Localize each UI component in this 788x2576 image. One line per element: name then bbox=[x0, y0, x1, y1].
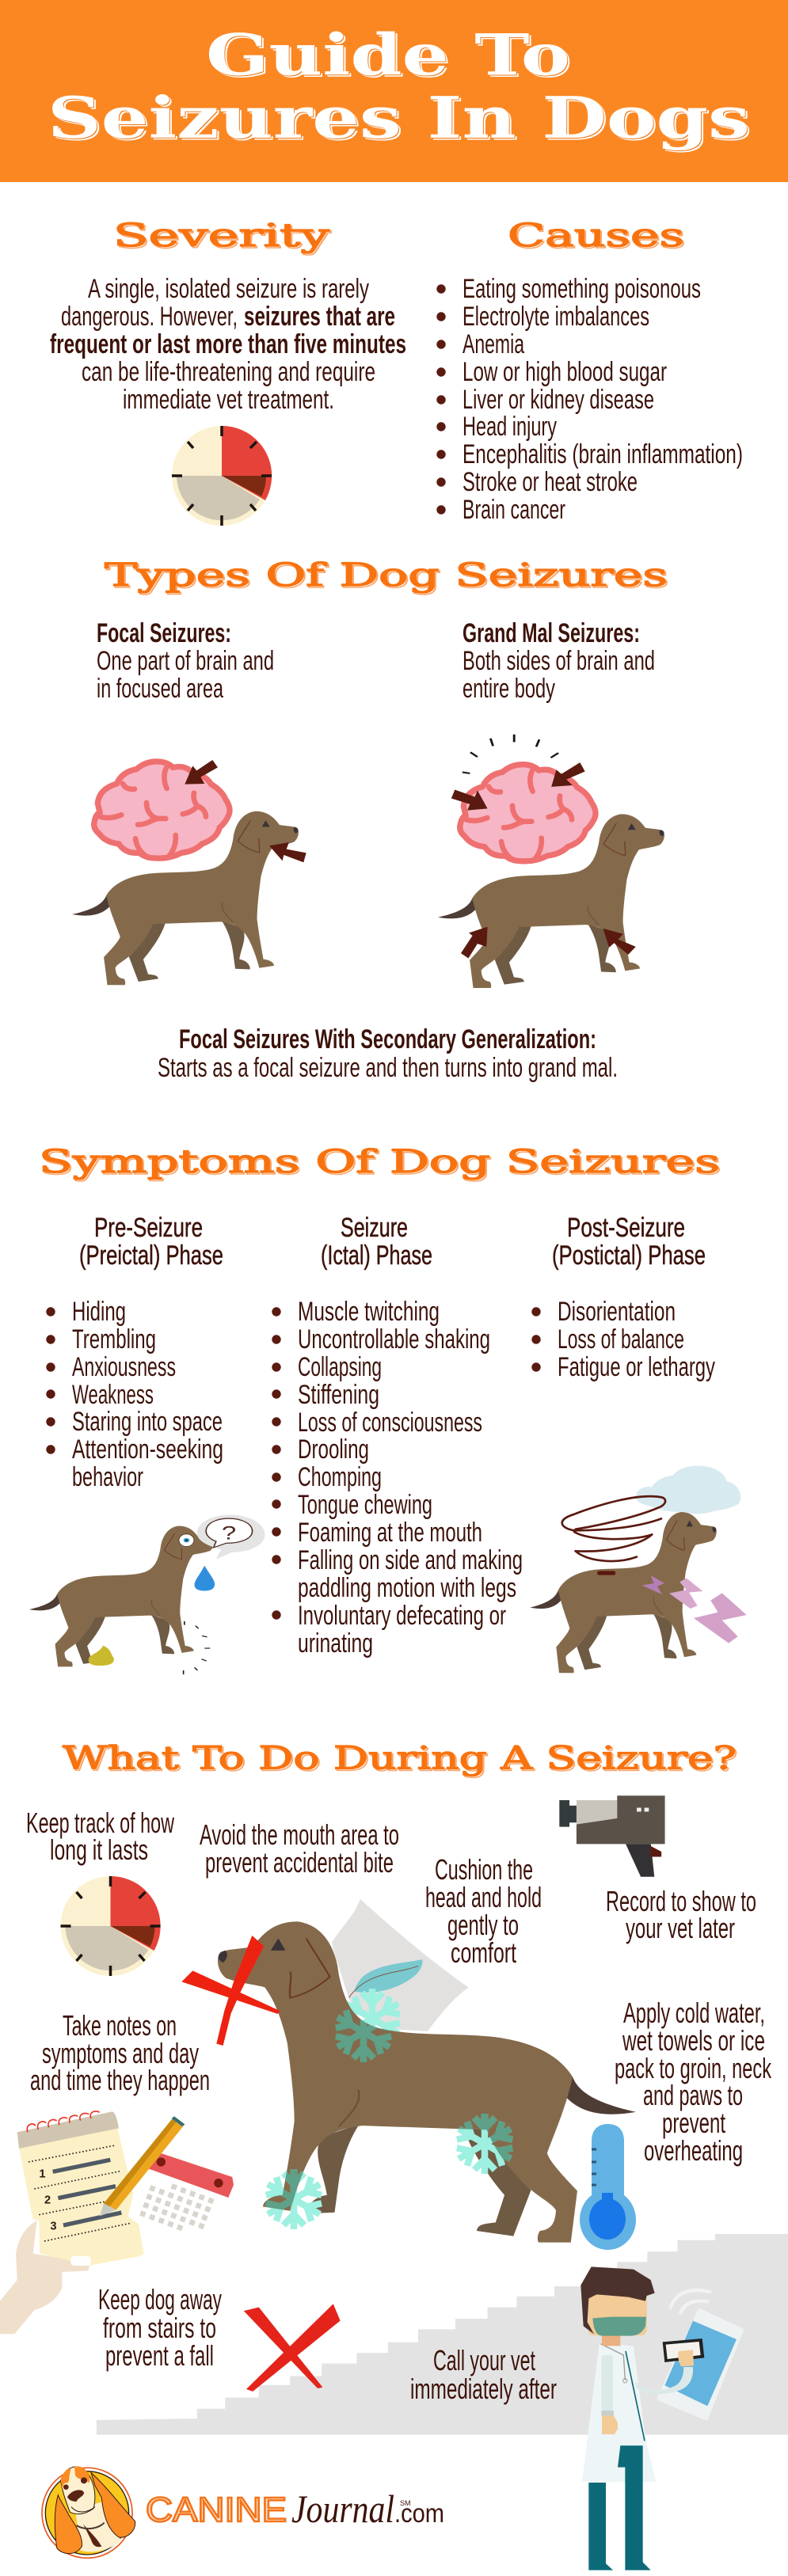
column: pre-seizure: Anxiousness bbox=[72, 1352, 176, 1382]
text: keep track bbox=[26, 1807, 175, 1866]
arrow: brain bbox=[185, 760, 218, 785]
illustration: grand mal seizure dog and brain bbox=[438, 735, 664, 988]
icon: cloud bbox=[636, 1466, 740, 1514]
text block: focal seizures: One part of brain and bbox=[97, 646, 274, 676]
text: call your vet: Call your vet bbox=[433, 2344, 535, 2377]
illustration: vet with phone bbox=[581, 2266, 742, 2570]
list: causes text: Brain cancer bbox=[463, 495, 565, 525]
text: avoid mouth: Avoid the mouth area to bbox=[200, 1818, 399, 1851]
panel: causes bbox=[436, 218, 743, 525]
list: causes text: Stroke or heat stroke bbox=[463, 467, 638, 497]
column: seizure bbox=[272, 1213, 523, 1658]
column: seizure: Falling on side and making bbox=[298, 1545, 523, 1575]
text: take notes: symptoms and day bbox=[42, 2037, 199, 2069]
list: causes text: Electrolyte imbalances bbox=[463, 302, 649, 332]
panel: severity bbox=[50, 218, 406, 526]
text: take notes: Take notes on bbox=[63, 2009, 177, 2042]
text block: severity description: can be life-threatening and require bbox=[82, 357, 375, 387]
icon: snowflake groin bbox=[454, 2114, 516, 2174]
arrows: grand mal bbox=[451, 762, 636, 959]
icon: hand bbox=[0, 2221, 89, 2334]
illustration: pre-seizure dog bbox=[29, 1515, 265, 1674]
heading: causes: Causes bbox=[509, 219, 686, 256]
icon: speech bubble bbox=[197, 1515, 265, 1560]
icon: motion ticks bbox=[184, 1621, 210, 1674]
heading: causes bbox=[508, 218, 686, 256]
heading: types bbox=[105, 557, 669, 595]
logo text: dot com: .com bbox=[394, 2498, 444, 2528]
icon: snowflake paw bbox=[263, 2169, 325, 2229]
column: pre-seizure: (Preictal) Phase bbox=[79, 1241, 223, 1271]
column: seizure: Involuntary defecating or bbox=[298, 1601, 506, 1631]
column: post-seizure: Loss of balance bbox=[558, 1324, 684, 1354]
text block: grand mal seizures: entire body bbox=[463, 674, 555, 704]
column: seizure: Muscle twitching bbox=[298, 1297, 440, 1327]
text: keep away from stairs: from stairs to bbox=[103, 2312, 216, 2344]
column: pre-seizure bbox=[46, 1213, 223, 1492]
icon: vet legs bbox=[588, 2445, 651, 2570]
heading: severity: Severity bbox=[115, 219, 332, 256]
arrow: mouth bbox=[269, 842, 306, 862]
icon: video camera bbox=[559, 1795, 665, 1877]
illustration: post-seizure dog bbox=[530, 1466, 747, 1673]
text block: grand mal seizures: Both sides of brain and bbox=[463, 646, 655, 676]
text: cushion: gently to bbox=[447, 1909, 519, 1941]
title: Guide To: Guide To bbox=[207, 22, 571, 89]
heading: symptoms bbox=[39, 1144, 721, 1182]
icon: snowflake neck bbox=[335, 2008, 392, 2062]
heading: types: Types Of Dog Seizures bbox=[105, 557, 668, 594]
text block: secondary generalization bbox=[158, 1024, 618, 1083]
logo text: canine: CANINE bbox=[146, 2491, 287, 2529]
icon: small device and hand bbox=[663, 2339, 704, 2366]
column: pre-seizure: Hiding bbox=[72, 1297, 126, 1327]
icon: notepad: 2 bbox=[44, 2194, 51, 2206]
icon: pain bolts bbox=[642, 1575, 747, 1643]
text: keep track: Keep track of how bbox=[26, 1807, 175, 1839]
list: causes text: Low or high blood sugar bbox=[463, 357, 667, 387]
column: seizure: (Ictal) Phase bbox=[321, 1241, 432, 1271]
text block: grand mal seizures: Grand Mal Seizures: bbox=[463, 618, 640, 648]
text: take notes: and time they happen bbox=[30, 2064, 210, 2096]
logo text: journal: Journal bbox=[291, 2487, 394, 2531]
icon: drool drop bbox=[195, 1566, 215, 1590]
icon: brown mark bbox=[597, 1571, 615, 1575]
column: seizure: Chomping bbox=[298, 1462, 382, 1492]
list: causes text: Anemia bbox=[463, 329, 524, 359]
text block: severity description: frequent or last more than five minutes bbox=[50, 329, 406, 359]
illustration: focal seizure dog and brain bbox=[72, 760, 306, 985]
column: pre-seizure: Staring into space bbox=[72, 1407, 223, 1437]
icon: red x bbox=[244, 2304, 341, 2392]
icon: vet coat bbox=[582, 2343, 693, 2482]
panel: types of dog seizures bbox=[72, 557, 669, 1083]
column: post-seizure: (Postictal) Phase bbox=[552, 1241, 706, 1271]
column: seizure: Collapsing bbox=[298, 1352, 382, 1382]
text: record: your vet later bbox=[626, 1912, 735, 1944]
heading: what to do: What To Do During A Seizure? bbox=[63, 1740, 737, 1776]
column: post-seizure: Post-Seizure bbox=[567, 1213, 685, 1243]
column: pre-seizure: behavior bbox=[72, 1462, 143, 1492]
column: post-seizure: Disorientation bbox=[558, 1297, 676, 1327]
icon: notepad: 3 bbox=[50, 2221, 56, 2233]
heading: severity: Severity bbox=[113, 218, 330, 254]
text: cushion: Cushion the bbox=[435, 1853, 533, 1886]
text: keep away from stairs bbox=[98, 2283, 222, 2372]
icon: phone bbox=[659, 2290, 742, 2418]
list: causes text: Liver or kidney disease bbox=[463, 385, 654, 415]
text: call your vet bbox=[410, 2344, 557, 2405]
icon: basset hound badge bbox=[42, 2466, 135, 2558]
heading: what to do: What To Do During A Seizure? bbox=[64, 1742, 738, 1778]
list: causes text bbox=[463, 274, 743, 525]
icon: timer clock bbox=[60, 1876, 161, 1976]
text: keep away from stairs: prevent a fall bbox=[105, 2339, 214, 2372]
text: cushion bbox=[425, 1853, 542, 1969]
icon: speech bubble: ? bbox=[222, 1523, 236, 1544]
text: keep track: long it lasts bbox=[50, 1833, 148, 1866]
title: Guide To: Guide To bbox=[208, 23, 573, 90]
text: avoid mouth: prevent accidental bite bbox=[205, 1846, 394, 1879]
title banner bbox=[0, 0, 788, 182]
column: seizure: Stiffening bbox=[298, 1380, 379, 1410]
text block: severity description: immediate vet treatment. bbox=[123, 385, 334, 415]
list: causes text: Head injury bbox=[463, 412, 557, 442]
title: Guide To: Guide To bbox=[206, 21, 570, 89]
icon: seizure rays bbox=[463, 735, 558, 773]
column: pre-seizure: Attention-seeking bbox=[72, 1434, 223, 1465]
text block: grand mal seizures bbox=[463, 618, 655, 704]
heading: what to do bbox=[63, 1740, 738, 1778]
icon: poop bbox=[89, 1646, 114, 1666]
heading: symptoms: Symptoms Of Dog Seizures bbox=[39, 1144, 720, 1180]
title: Seizures In Dogs: Seizures In Dogs bbox=[48, 85, 751, 152]
text block: severity description: seizures that are bbox=[244, 302, 395, 332]
illustration: notepad and hand bbox=[0, 2111, 234, 2334]
column: seizure: Seizure bbox=[341, 1213, 408, 1243]
icon: notepad bbox=[17, 2111, 144, 2266]
text block: secondary generalization: Focal Seizures With Secondary Generalization: bbox=[179, 1024, 596, 1054]
logo text: service mark: SM bbox=[400, 2499, 410, 2507]
column: seizure: Foaming at the mouth bbox=[298, 1518, 482, 1548]
text: keep away from stairs: Keep dog away bbox=[98, 2283, 222, 2316]
panel: what to do during a seizure bbox=[0, 1740, 772, 2570]
icon: notepad: 1 bbox=[39, 2168, 45, 2181]
icon: calendar bbox=[140, 2149, 234, 2228]
column: post-seizure bbox=[531, 1213, 715, 1382]
text block: focal seizures bbox=[97, 618, 274, 704]
text: avoid mouth bbox=[200, 1818, 399, 1879]
column: pre-seizure: Trembling bbox=[72, 1324, 156, 1354]
text block: focal seizures: Focal Seizures: bbox=[97, 618, 231, 648]
panel: symptoms bbox=[29, 1144, 747, 1674]
icon: red x on mouth bbox=[181, 1936, 280, 2046]
column: pre-seizure: Weakness bbox=[72, 1380, 154, 1410]
logo: canine journal bbox=[42, 2466, 444, 2558]
text: take notes bbox=[30, 2009, 210, 2096]
text: apply cold water: prevent bbox=[662, 2107, 725, 2139]
column: seizure: paddling motion with legs bbox=[298, 1573, 516, 1603]
illustration: large dog bbox=[218, 1921, 636, 2243]
text: apply cold water bbox=[615, 1997, 772, 2167]
text block: focal seizures: in focused area bbox=[97, 674, 223, 704]
icon: thermometer bbox=[580, 2124, 636, 2250]
text: call your vet: immediately after bbox=[410, 2373, 557, 2405]
column: post-seizure: Fatigue or lethargy bbox=[558, 1352, 715, 1382]
text block: severity description: dangerous. However, bbox=[61, 302, 238, 332]
title: Seizures In Dogs: Seizures In Dogs bbox=[50, 85, 752, 154]
text: cushion: comfort bbox=[451, 1936, 516, 1969]
icon: snowflake behind neck bbox=[341, 1989, 403, 2049]
heading: causes: Causes bbox=[508, 218, 684, 254]
heading: symptoms: Symptoms Of Dog Seizures bbox=[40, 1146, 721, 1182]
column: seizure: Drooling bbox=[298, 1434, 369, 1465]
text block: severity description bbox=[50, 274, 406, 415]
icon: feather bbox=[349, 1959, 422, 1997]
text: cushion: head and hold bbox=[425, 1881, 542, 1913]
column: seizure: Loss of consciousness bbox=[298, 1408, 482, 1438]
title: Seizures In Dogs: Seizures In Dogs bbox=[48, 84, 750, 151]
icon: wide eye bbox=[179, 1534, 194, 1546]
column: pre-seizure: Pre-Seizure bbox=[94, 1213, 203, 1243]
stairs backdrop bbox=[97, 2234, 788, 2435]
column: seizure: Tongue chewing bbox=[298, 1490, 432, 1520]
icon: clock bbox=[172, 426, 272, 526]
icon: dizzy swirl bbox=[562, 1496, 665, 1561]
text: record bbox=[606, 1885, 756, 1944]
heading: severity bbox=[113, 218, 332, 256]
icon: vet head bbox=[581, 2266, 655, 2346]
list: causes bullets bbox=[436, 284, 446, 515]
icon: pillow bbox=[332, 1899, 469, 2031]
text block: severity description: A single, isolated seizure is rarely bbox=[88, 274, 369, 304]
column: seizure: urinating bbox=[298, 1628, 373, 1658]
heading: types: Types Of Dog Seizures bbox=[106, 559, 669, 595]
icon: pencil bbox=[100, 2116, 185, 2216]
column: seizure: Uncontrollable shaking bbox=[298, 1324, 490, 1354]
